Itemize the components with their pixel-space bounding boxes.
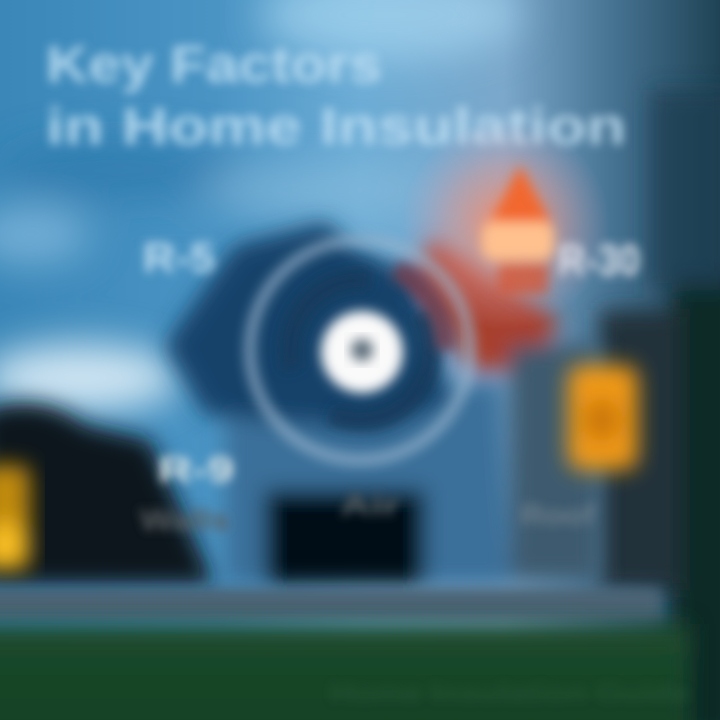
house [165, 222, 600, 585]
fire glow [400, 120, 610, 330]
house roof [165, 222, 450, 430]
icon: circular gauge [250, 240, 470, 460]
gauge inner ring [290, 280, 430, 420]
scene: treeline left [0, 404, 215, 585]
small labels lower: Walls [140, 504, 230, 537]
scene: dark trees right [600, 90, 720, 720]
icon: warning flame [482, 165, 554, 294]
window: orange right [568, 365, 638, 470]
house wall [225, 380, 510, 585]
gauge accent arc [395, 270, 445, 350]
window: orange left [0, 465, 30, 570]
small labels lower: Roof [520, 499, 596, 532]
small labels lower: R-9 [158, 449, 234, 490]
title: Key Factors [46, 36, 382, 94]
gauge outer ring [250, 240, 470, 460]
stat label right: R-30 [558, 236, 640, 285]
stat label left: R-5 [143, 234, 215, 281]
roof glow section [415, 238, 560, 370]
grass [0, 624, 690, 720]
small labels lower [140, 449, 596, 537]
garage doors [265, 490, 425, 585]
gauge center [321, 311, 403, 393]
small labels lower: Air [340, 489, 400, 522]
road [0, 588, 660, 620]
clouds [0, 0, 520, 412]
gauge center dot [351, 339, 373, 361]
title [46, 36, 626, 156]
title: in Home Insulation [46, 98, 626, 156]
footer text: Home Insulation Guide [330, 678, 690, 708]
side wall [510, 345, 600, 580]
